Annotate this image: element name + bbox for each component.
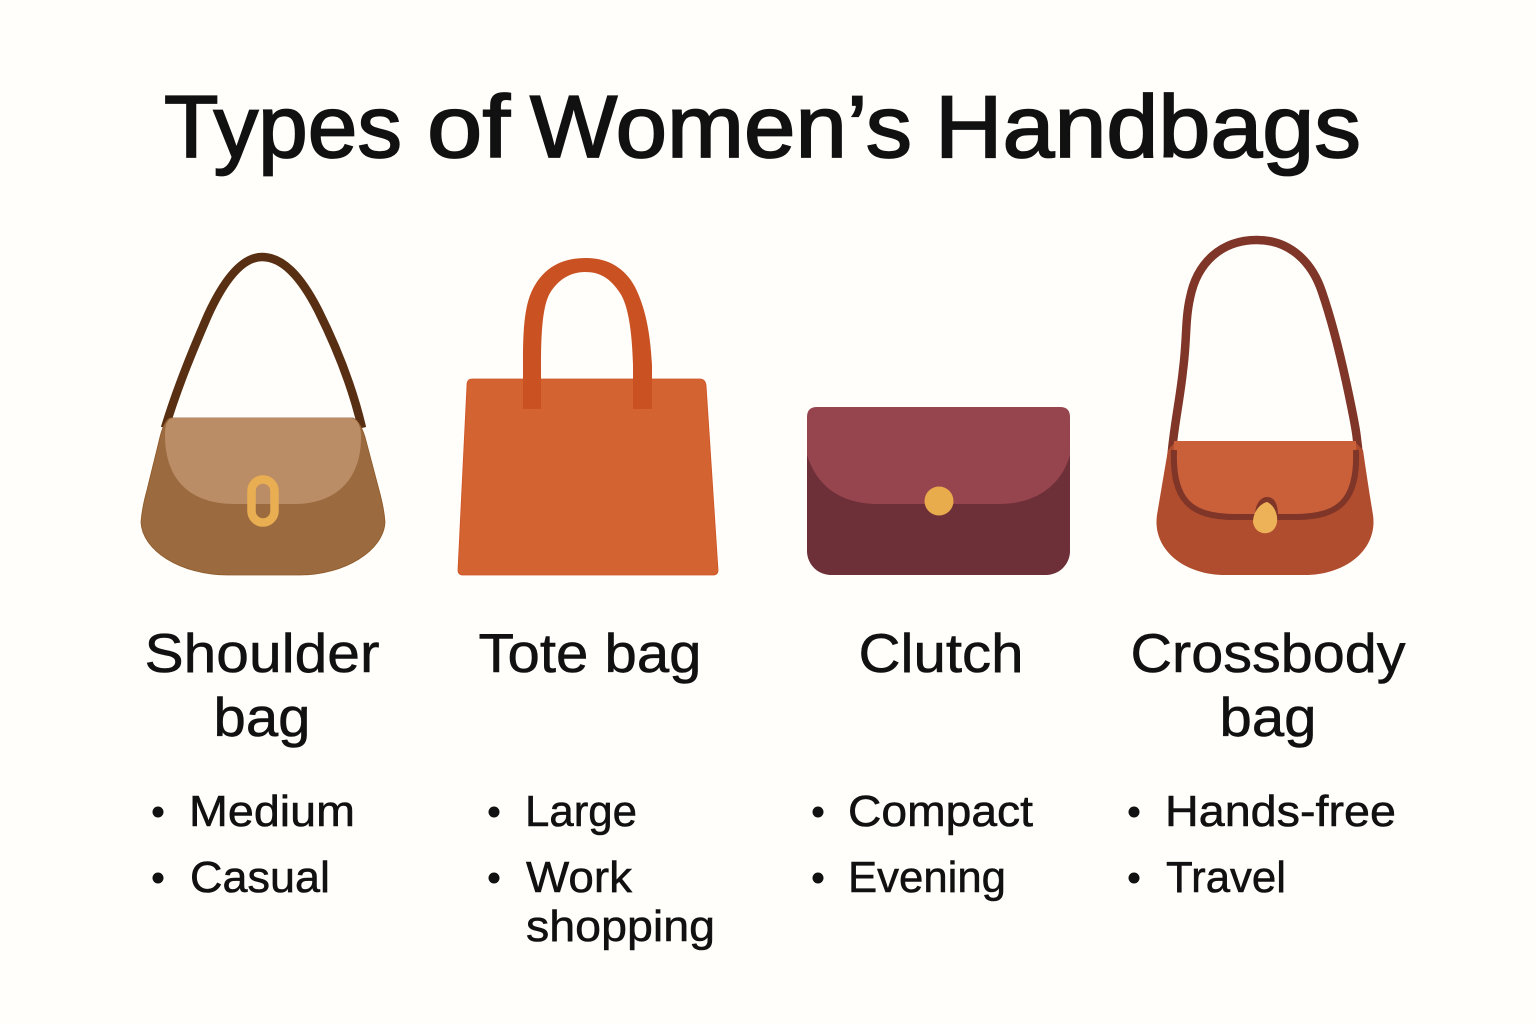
- list: clutch: Compact: [848, 787, 1033, 836]
- panel: shoulder bag: bag: [214, 686, 310, 748]
- title: of: [427, 77, 511, 176]
- icon: crossbody bag: [1156, 240, 1374, 575]
- heading: crossbody bag: Crossbody: [1130, 622, 1406, 684]
- list: tote bag: shopping: [526, 902, 715, 951]
- list: tote bag: Large: [525, 787, 637, 836]
- title: Handbags: [935, 77, 1361, 176]
- list: shoulder bag: Casual: [190, 853, 330, 902]
- list: crossbody bag: Travel: [1166, 853, 1286, 902]
- icon: tote bag: [458, 258, 718, 575]
- title: Types: [164, 77, 402, 176]
- list: clutch: [812, 787, 1033, 902]
- title: Women’s: [530, 77, 912, 176]
- list: crossbody bag: Hands-free: [1165, 787, 1396, 836]
- heading: clutch: Clutch: [858, 622, 1024, 684]
- panel: crossbody bag: bag: [1220, 686, 1316, 748]
- title: [164, 77, 1361, 176]
- heading: tote bag: Tote bag: [478, 622, 702, 684]
- panel: clutch: [807, 407, 1070, 902]
- list: clutch: Evening: [848, 853, 1006, 902]
- panel: shoulder bag: [141, 257, 385, 902]
- panel: tote bag: [458, 258, 718, 951]
- icon: shoulder bag: [141, 257, 385, 575]
- icon: clutch: [807, 407, 1070, 575]
- panel: crossbody bag: [1128, 240, 1406, 902]
- list: crossbody bag: [1128, 787, 1396, 902]
- heading: shoulder bag: Shoulder: [144, 622, 380, 684]
- list: shoulder bag: Medium: [189, 787, 355, 836]
- list: tote bag: Work: [526, 853, 633, 902]
- list: shoulder bag: [152, 787, 355, 902]
- list: tote bag: [488, 787, 715, 951]
